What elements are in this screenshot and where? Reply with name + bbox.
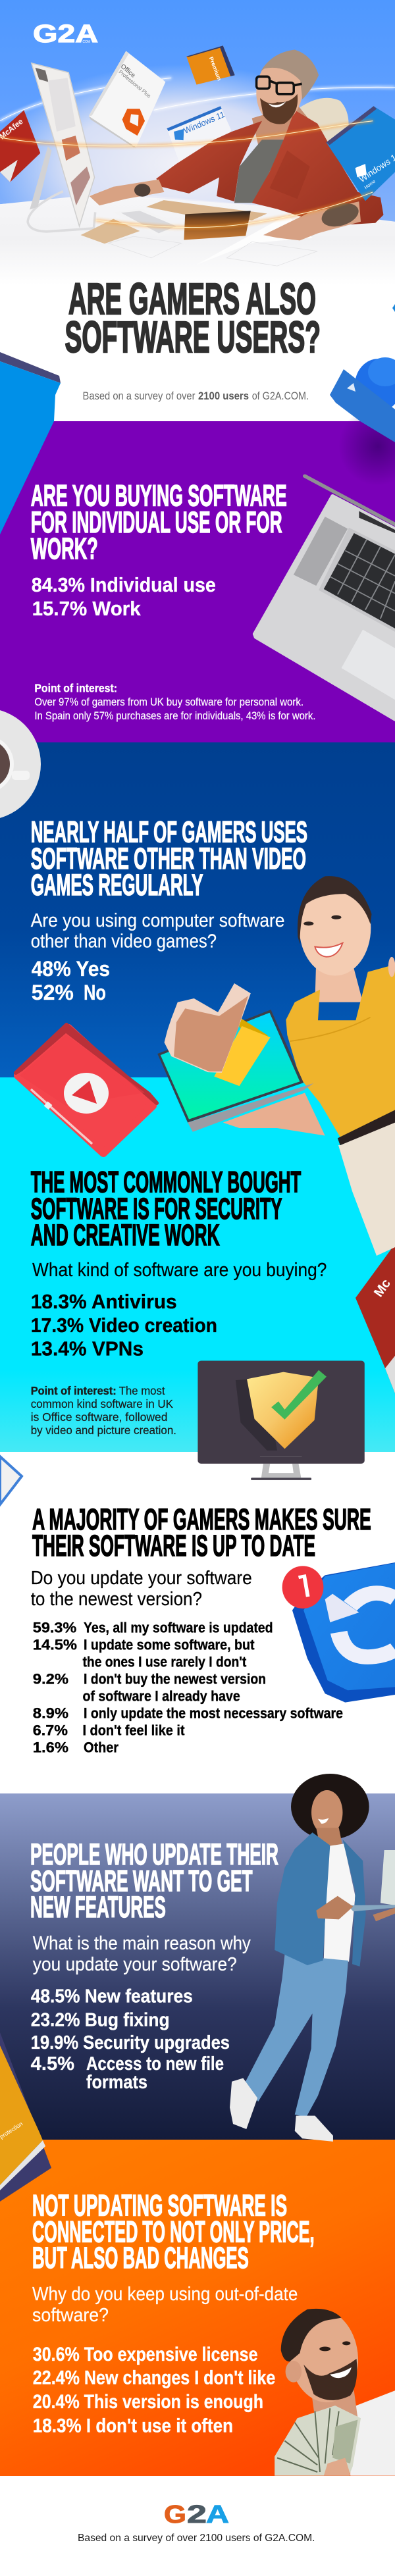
logo: G2A bottom: G [164,2501,186,2529]
stats list: of software I already have [83,1688,240,1705]
icon: windows 10 box: Home [363,178,377,190]
stats list: 1.6% [33,1739,68,1756]
heading [30,1838,278,1924]
question [31,1568,252,1610]
icon: windows 10 box [327,106,395,201]
point of interest [34,682,315,722]
stats: 18.3% I don't use it often [33,2415,233,2437]
hero illustration [0,0,395,421]
stats: 48% Yes [32,957,110,981]
point of interest: is Office software, followed [31,1410,168,1424]
question: Why do you keep using out-of-date [32,2284,298,2305]
panel: individual or work [0,408,395,742]
panel: most bought software [0,1077,395,1480]
stats list: 6.7% [33,1722,68,1739]
stats: 13.4% VPNs [31,1337,144,1360]
stats: 30.6% Too expensive license [33,2344,258,2365]
stats: 48.5% New features [31,1986,193,2007]
stats list: I don't buy the newest version [84,1671,266,1687]
stats list: 9.2% [33,1671,68,1687]
point of interest: Over 97% of gamers from UK buy software for personal work. [34,696,303,708]
decoration: box corner [0,1456,22,1505]
stats list: I update some software, but [84,1637,255,1653]
decoration: windows 11 box right [330,287,395,486]
question: software? [32,2305,109,2326]
decoration: blue box left [0,352,61,534]
icon: monitor [28,63,95,232]
stats [31,1986,230,2093]
icon: office box: Office [119,63,137,80]
icon: avast box [0,2032,51,2202]
stats [32,573,216,620]
heading: GAMES REGULARLY [31,868,203,902]
logo: G2A bottom [164,2501,229,2529]
stats list: 8.9% [33,1705,68,1722]
title [65,274,321,362]
heading: WORK? [31,532,98,565]
icon: mcafee box right: Mc [371,1276,394,1300]
stats list: I only update the most necessary software [84,1705,343,1722]
point of interest: Point of interest: [31,1384,117,1397]
stats: 84.3% Individual use [32,573,216,596]
panel: keep software up to date [0,1452,395,1793]
stats list: I don't feel like it [83,1722,185,1739]
point of interest: In Spain only 57% purchases are for individuals, 43% is for work. [34,709,315,722]
point of interest [31,1384,176,1437]
question: Do you update your software [31,1568,252,1589]
question: to the newest version? [31,1589,202,1610]
stats: 17.3% Video creation [31,1314,217,1337]
panel: reasons to update [0,1774,395,2202]
icon: mcafee box right [356,1244,395,1393]
survey note: of G2A.COM. [252,390,309,402]
question: you update your software? [33,1954,237,1975]
icon: mcafee box [0,110,40,182]
figure: trousers [338,1145,395,1256]
question [33,1933,251,1975]
stats: 4.5% [31,2053,74,2074]
question [32,2284,298,2326]
desk items [80,199,361,266]
icon: laptop [255,476,395,719]
icon: office box [89,51,165,147]
point of interest: common kind software in UK [31,1397,173,1410]
panel: not updating [0,2140,395,2476]
figure: woman with laptop [230,1774,395,2142]
question: Are you using computer software [31,910,284,931]
icon: avast box [186,45,235,85]
panel: footer [0,2476,395,2576]
stats list [33,1620,343,1756]
survey note: Based on a survey of over [83,390,196,402]
light streaks [0,78,395,121]
point of interest: Point of interest: [34,682,117,695]
stats: formats [86,2072,147,2093]
icon: avast box: Premium [208,56,223,82]
icon: update badge [282,1562,395,1703]
stats: 15.7% Work [32,597,141,620]
icon: windows 11 box: Windows 11 [182,109,226,136]
survey note [83,390,309,402]
icon: windows 11 box [167,106,231,174]
icon: office box: Professional Plus [118,69,152,99]
icon: chair [300,98,349,151]
stats list: 14.5% [33,1637,77,1653]
heading: AND CREATIVE WORK [31,1218,220,1252]
figure: man with money [275,2302,395,2476]
stats [32,957,110,1004]
stats list: Yes, all my software is updated [84,1620,273,1636]
stats list: the ones I use rarely I don't [83,1654,247,1670]
question [31,910,284,952]
stats list: 59.3% [33,1620,76,1636]
heading [32,1503,371,1562]
figure: woman with laptop [157,876,395,1164]
heading: NEW FEATURES [30,1890,166,1924]
stats: 18.3% Antivirus [31,1290,177,1313]
stats [31,1290,217,1360]
stats: 22.4% New changes I don't like [33,2367,275,2389]
panel: other software [0,708,395,1393]
question: What kind of software are you buying? [32,1260,327,1281]
logo: G2A bottom: 2 [187,2501,207,2529]
question: What is the main reason why [33,1933,251,1954]
logo: G2A top: G2A [33,20,98,48]
heading [32,2188,315,2275]
figure: man at desk [90,50,383,226]
question: other than video games? [31,931,217,952]
stats: 52% [32,981,74,1004]
point of interest: by video and picture creation. [31,1424,176,1437]
stats list: Other [84,1739,118,1756]
survey note: Based on a survey of over 2100 users of G2A.COM. [78,2533,315,2544]
stats: Access to new file [86,2053,224,2074]
heading [31,1165,301,1252]
icon: coffee cup [0,708,41,820]
heading [31,479,287,565]
stats: 20.4% This version is enough [33,2391,263,2413]
icon: video player [16,1025,157,1153]
panel: hero [0,0,395,534]
point of interest: The most [119,1384,165,1397]
logo: G2A top: .COM [82,40,90,44]
orange light streaks [0,121,373,228]
stats: 23.2% Bug fixing [31,2010,170,2031]
survey note: 2100 users [198,390,249,402]
stats: 19.9% Security upgrades [31,2032,230,2053]
stats: No [84,981,106,1004]
logo: G2A bottom: A [206,2501,229,2529]
heading [31,815,307,902]
stats [33,2344,275,2437]
icon: monitor with shield [198,1360,365,1480]
